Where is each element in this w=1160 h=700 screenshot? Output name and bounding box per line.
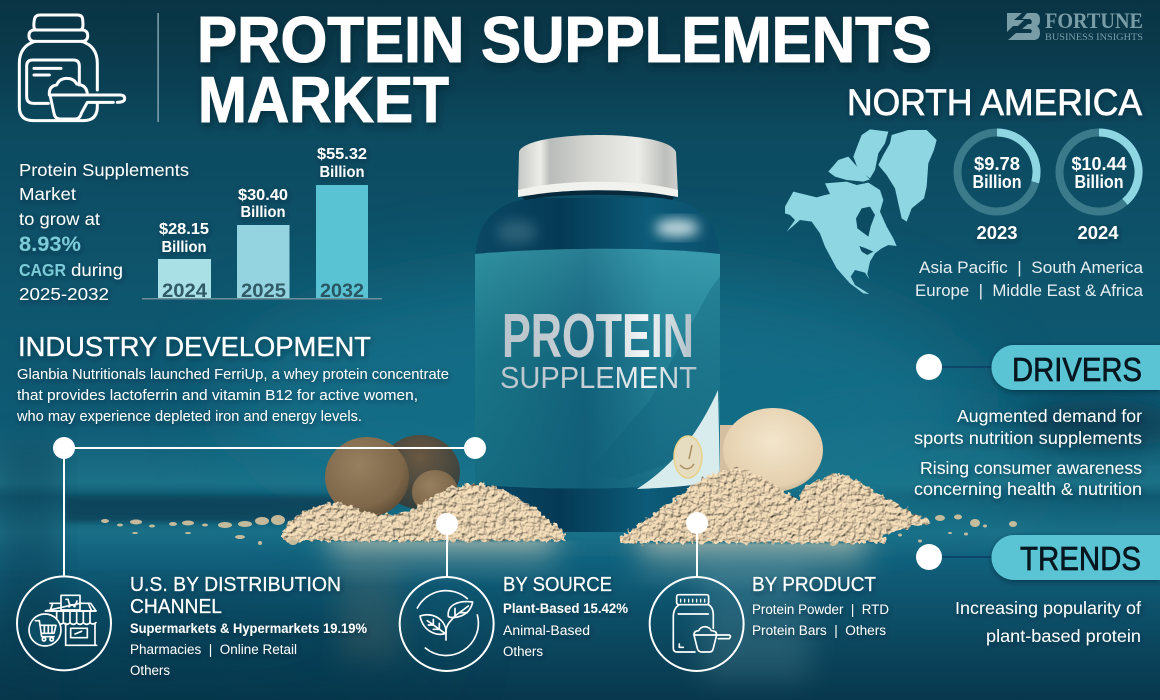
- map: north america: [785, 129, 937, 294]
- drivers header: DRIVERS: [1012, 351, 1142, 388]
- bar 2025: 2025: [241, 280, 286, 302]
- source text: Others: [503, 644, 543, 659]
- powder piles: [282, 469, 932, 543]
- growth statement: CAGR: [19, 260, 66, 280]
- bar 2024: 2024: [162, 280, 207, 302]
- logo wordmark: BUSINESS INSIGHTS: [1045, 33, 1143, 43]
- logo mark: [1007, 13, 1040, 40]
- trends text: Increasing popularity of: [955, 598, 1141, 618]
- channel text: Supermarkets & Hypermarkets 19.19%: [130, 621, 367, 636]
- bar 2032: 2032: [320, 280, 364, 302]
- channel text: Pharmacies | Online Retail: [130, 642, 297, 657]
- icon: jar and scoop: [650, 577, 744, 671]
- other regions: [915, 258, 1144, 300]
- growth statement: [19, 160, 189, 304]
- drivers text: sports nutrition supplements: [914, 428, 1142, 448]
- label text: SUPPLEMENT: [500, 360, 697, 395]
- channel text: U.S. BY DISTRIBUTION: [130, 574, 341, 596]
- header divider: [158, 13, 159, 122]
- bar 2024: [158, 221, 211, 302]
- bar 2025: $30.40: [238, 187, 288, 204]
- bar 2032: Billion: [320, 164, 364, 181]
- growth statement: 8.93%: [19, 233, 81, 256]
- drivers text: concerning health & nutrition: [914, 479, 1142, 499]
- product text: Protein Powder | RTD: [752, 602, 889, 617]
- logo wordmark: [1045, 8, 1143, 43]
- product text: [752, 574, 889, 638]
- drivers text: [914, 406, 1142, 499]
- heading: north america: NORTH AMERICA: [847, 81, 1142, 123]
- trends text: [955, 598, 1141, 646]
- panel: distribution channel: [17, 574, 367, 678]
- title: [197, 3, 932, 136]
- jar lid: [518, 135, 678, 195]
- connector: distribution channel: [53, 437, 486, 576]
- floor reflections: [330, 541, 865, 680]
- trends text: plant-based protein: [986, 626, 1141, 646]
- source text: Plant-Based 15.42%: [503, 601, 628, 616]
- label text: [500, 302, 697, 395]
- jar highlights: [497, 219, 699, 244]
- jar body: [475, 198, 720, 532]
- panel: drivers: [914, 345, 1160, 499]
- icon: store and cart: [17, 576, 111, 670]
- industry development: that provides lactoferrin and vitamin B12 for active women,: [17, 387, 418, 404]
- label swoosh: [637, 390, 720, 489]
- drivers text: Rising consumer awareness: [920, 458, 1142, 478]
- panel: by source: [400, 513, 628, 671]
- donut 2024: $10.44: [1072, 154, 1126, 174]
- donut 2023: [958, 132, 1037, 243]
- connector: [686, 512, 708, 577]
- channel text: Others: [130, 663, 170, 678]
- jar label: [475, 249, 720, 489]
- other regions: Europe | Middle East & Africa: [915, 281, 1144, 300]
- title: MARKET: [198, 63, 449, 136]
- icon: protein jar and scoop: [19, 15, 125, 121]
- bar 2025: [237, 187, 290, 302]
- industry development: INDUSTRY DEVELOPMENT: [18, 331, 371, 362]
- brand logo: [1007, 8, 1143, 43]
- source text: BY SOURCE: [503, 574, 612, 596]
- donut 2024: 2024: [1078, 223, 1118, 243]
- growth statement: during: [71, 260, 123, 280]
- industry development: Glanbia Nutritionals launched FerriUp, a whey protein concentrate: [17, 366, 449, 383]
- product text: BY PRODUCT: [752, 574, 876, 596]
- connector: [436, 513, 458, 577]
- industry development: [16, 331, 449, 425]
- other regions: Asia Pacific | South America: [919, 258, 1144, 277]
- donut 2023: 2023: [976, 223, 1018, 243]
- trends header: TRENDS: [1020, 540, 1141, 577]
- source text: Animal-Based: [503, 623, 590, 638]
- industry development: who may experience depleted iron and energy levels.: [16, 408, 362, 425]
- product text: Protein Bars | Others: [752, 623, 886, 638]
- channel text: CHANNEL: [130, 596, 222, 618]
- trends header: [916, 535, 1160, 580]
- product jar: [475, 135, 720, 532]
- title: PROTEIN SUPPLEMENTS: [197, 3, 932, 76]
- protein balls behind powder: [325, 408, 823, 517]
- bar 2024: $28.15: [159, 221, 209, 238]
- bar chart: market size: [142, 146, 382, 302]
- logo wordmark: FORTUNE: [1045, 8, 1143, 33]
- drivers text: Augmented demand for: [957, 406, 1142, 426]
- bar 2024: Billion: [162, 239, 206, 256]
- icon: leaves: [400, 577, 494, 671]
- growth statement: to grow at: [19, 209, 100, 229]
- bar 2025: Billion: [240, 204, 286, 221]
- label text: PROTEIN: [502, 302, 694, 371]
- channel text: [130, 574, 367, 678]
- scattered powder crumbs: [101, 514, 1017, 546]
- bar 2032: $55.32: [317, 146, 367, 163]
- growth statement: Market: [19, 184, 76, 204]
- donut 2024: [1060, 132, 1139, 243]
- donut 2023: Billion: [972, 172, 1022, 192]
- panel: trends: [916, 535, 1160, 646]
- source text: [503, 574, 628, 659]
- growth statement: Protein Supplements: [19, 160, 189, 180]
- drivers header: [916, 345, 1160, 390]
- panel: by product: [650, 512, 889, 671]
- donut 2023: $9.78: [974, 154, 1020, 174]
- growth statement: 2025-2032: [19, 284, 109, 304]
- label seal: [674, 436, 702, 478]
- bar 2032: [316, 146, 368, 302]
- donut 2024: Billion: [1074, 172, 1124, 192]
